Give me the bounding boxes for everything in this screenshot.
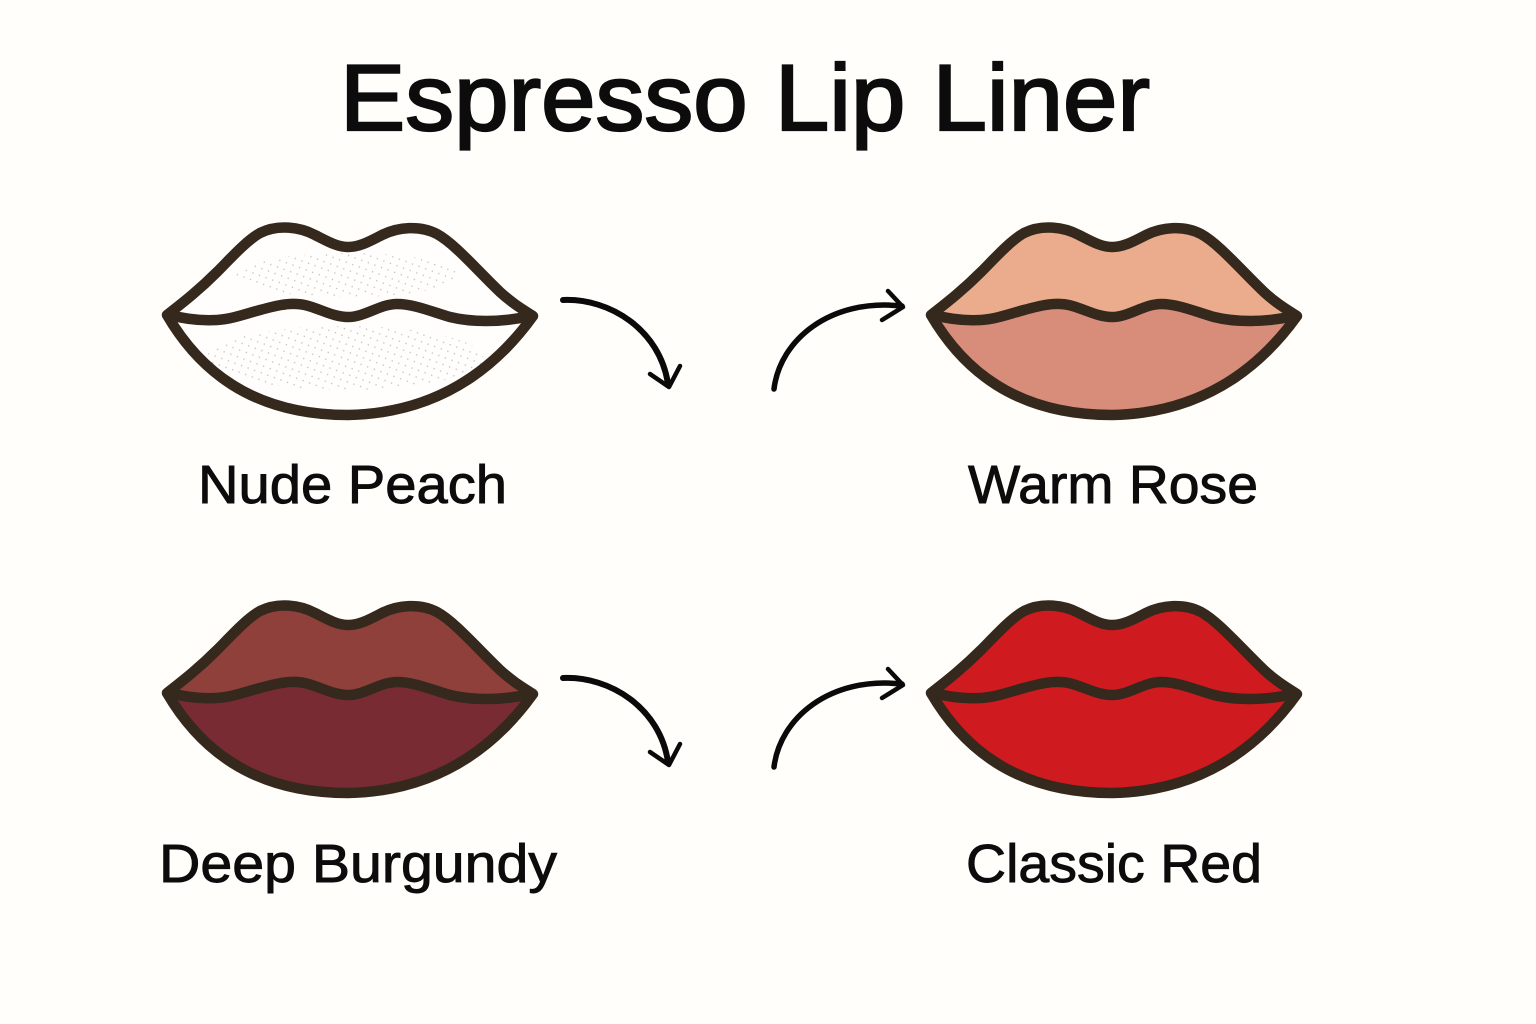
lips: deep burgundy xyxy=(167,605,533,793)
label: nude peach: Nude Peach xyxy=(198,455,507,515)
arrow: to warm rose xyxy=(774,291,903,389)
lips: nude peach xyxy=(167,227,533,415)
lips: classic red xyxy=(931,605,1297,793)
label: warm rose: Warm Rose xyxy=(968,455,1258,515)
label: classic red: Classic Red xyxy=(966,834,1262,894)
label: deep burgundy: Deep Burgundy xyxy=(159,834,557,894)
arrow: to classic red xyxy=(774,669,903,767)
arrow: nude peach down right xyxy=(563,300,680,387)
arrow: deep burgundy down right xyxy=(563,678,680,765)
title: Espresso Lip Liner xyxy=(340,45,1150,150)
lips: warm rose xyxy=(931,227,1297,415)
